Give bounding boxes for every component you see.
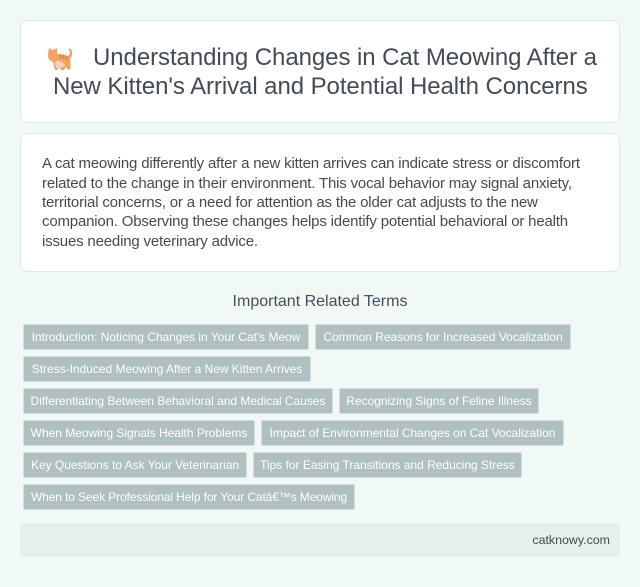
description text (42, 155, 580, 250)
tag list (23, 324, 571, 510)
tag: Common Reasons for Increased Vocalization (323, 330, 563, 344)
footer source text: catknowy.com (532, 533, 610, 547)
description text: companion. Observing these changes helps identify potential behavioral or health (42, 213, 568, 230)
description text: issues needing veterinary advice. (42, 233, 258, 250)
tag: Impact of Environmental Changes on Cat Vocalization (270, 426, 555, 440)
panel: title card (20, 20, 620, 123)
tag (23, 324, 309, 350)
icon: cat (48, 48, 72, 70)
description text: A cat meowing differently after a new kitten arrives can indicate stress or discomfort (42, 155, 580, 172)
tag (23, 484, 355, 510)
tag (23, 420, 255, 446)
tag (23, 356, 311, 382)
heading: important related terms: Important Related Terms (233, 293, 407, 310)
tag: Differentiating Between Behavioral and Medical Causes (31, 394, 325, 408)
tag: Key Questions to Ask Your Veterinarian (31, 458, 239, 472)
tag (261, 420, 564, 446)
tag: Stress-Induced Meowing After a New Kitten Arrives (32, 362, 302, 376)
title line 1: Understanding Changes in Cat Meowing After a (93, 44, 597, 71)
tag (315, 324, 571, 350)
tag (23, 388, 333, 414)
tag: When to Seek Professional Help for Your Catâ€™s Meowing (31, 490, 347, 504)
tag (339, 388, 539, 414)
description text: related to the change in their environment. This vocal behavior may signal anxiety, (42, 175, 572, 192)
description text: territorial concerns, or a need for attention as the older cat adjusts to the new (42, 194, 538, 211)
title line 2: New Kitten's Arrival and Potential Health Concerns (53, 73, 588, 100)
panel: description card (20, 133, 620, 272)
tag (23, 452, 247, 478)
footer bar (20, 523, 620, 557)
tag: Tips for Easing Transitions and Reducing Stress (260, 458, 515, 472)
tag: Introduction: Noticing Changes in Your Cat's Meow (32, 330, 300, 344)
tag: Recognizing Signs of Feline Illness (346, 394, 532, 408)
tag: When Meowing Signals Health Problems (31, 426, 247, 440)
tag (253, 452, 522, 478)
